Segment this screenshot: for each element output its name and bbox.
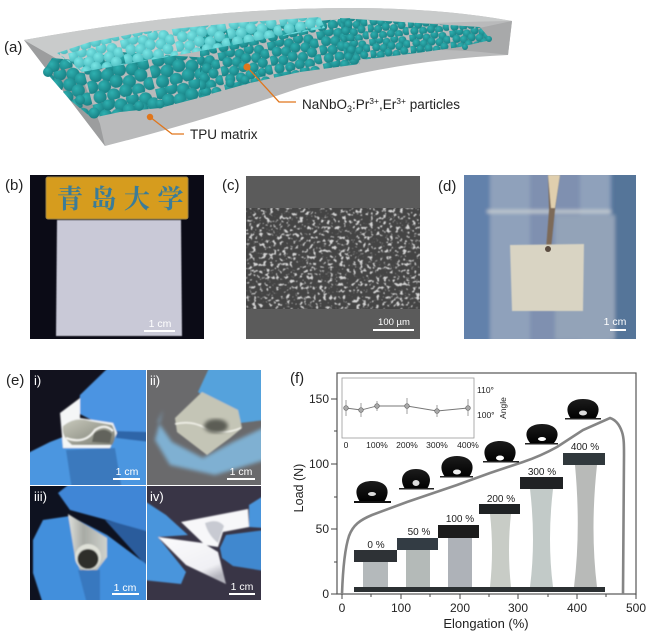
leader: particles [243, 63, 296, 102]
x tick labels: 500 [626, 601, 646, 615]
specimen strain labels: 0 % [367, 540, 385, 551]
y tick labels [309, 392, 329, 601]
label b: (b) [5, 177, 23, 194]
x tick labels [339, 601, 646, 615]
label: particles: 3+ [396, 96, 406, 106]
label c: (c) [222, 177, 240, 194]
scale bar: 1 cm [604, 316, 627, 328]
bright particles [246, 208, 420, 309]
glass beaker [464, 175, 636, 339]
label f: (f) [290, 370, 304, 387]
photo iii: 1 cm [114, 582, 137, 594]
photo iv: 1 cm [231, 581, 254, 593]
panel b: photograph of film under badge [5, 175, 204, 339]
label: matrix: TPU matrix [190, 127, 258, 142]
photo iv [143, 486, 265, 600]
dark teal particles [44, 18, 491, 118]
specimen strain labels: 200 % [487, 494, 515, 505]
SEM background [246, 176, 420, 339]
y axis title: Load (N) [292, 464, 306, 512]
scale bar: 1 cm [149, 318, 172, 330]
inset: contact angle plot: 110° [477, 385, 494, 395]
panel e: bending photographs [6, 366, 265, 604]
photo i: i) [34, 373, 41, 388]
particle band [246, 208, 420, 309]
label: particles: ,Er [379, 97, 397, 112]
scale bar [144, 318, 175, 332]
y tick labels: 50 [316, 522, 329, 536]
white film [56, 220, 182, 336]
dark background [30, 175, 204, 339]
x axis title: Elongation (%) [443, 616, 529, 631]
label: particles: particles [406, 97, 460, 112]
inset: contact angle plot: 300% [426, 440, 448, 450]
x tick labels: 0 [339, 601, 346, 615]
inset: contact angle plot: 400% [457, 440, 479, 450]
label: particles: NaNbO [302, 97, 347, 112]
label: particles: 3 [347, 104, 352, 114]
slab body [24, 8, 512, 146]
photo ii: ii) [150, 373, 160, 388]
scale bar [373, 317, 414, 331]
inset: contact angle plot: 200% [396, 440, 418, 450]
label e: (e) [6, 372, 24, 389]
film [510, 244, 584, 311]
yellow badge: 青岛大学 [57, 179, 191, 216]
specimen strain labels [367, 442, 599, 551]
specimen strain labels: 100 % [446, 514, 474, 525]
x tick labels: 300 [508, 601, 528, 615]
photo ii [147, 366, 265, 485]
inset: contact angle plot: 100% [366, 440, 388, 450]
panel a: composite slab schematic [4, 8, 512, 146]
light teal particles seen through top surface [57, 17, 325, 72]
photo iii: iii) [34, 489, 47, 504]
scattered edge particles [43, 36, 492, 118]
y tick labels: 100 [309, 457, 329, 471]
panel d: film immersed in water [438, 170, 640, 345]
inset: contact angle plot: 100° [477, 410, 495, 420]
panel c: SEM cross-section [222, 176, 420, 339]
specimen strain labels: 300 % [528, 467, 556, 478]
inset: contact angle plot: Angle [498, 397, 508, 419]
x tick labels: 400 [567, 601, 587, 615]
blue backdrop [607, 175, 614, 339]
inset: contact angle plot: 0 [344, 440, 349, 450]
scale bar: 100 µm [378, 317, 410, 328]
x tick labels: 100 [391, 601, 411, 615]
tweezers [546, 175, 560, 249]
y tick labels: 150 [309, 392, 329, 406]
load curve [342, 418, 624, 594]
water droplets [354, 399, 601, 503]
leader: matrix [147, 114, 184, 134]
inset: contact angle plot [342, 378, 508, 450]
label: particles: 3+ [369, 96, 379, 106]
y tick labels: 0 [322, 587, 329, 601]
specimen strain labels: 400 % [571, 442, 599, 453]
label d: (d) [438, 178, 456, 195]
axes frame [331, 373, 636, 599]
photo iv: iv) [150, 489, 164, 504]
photo ii: 1 cm [230, 466, 253, 478]
photo iii [30, 482, 150, 604]
tensile specimens [354, 453, 605, 592]
label: particles: :Pr [352, 97, 370, 112]
panel f: load-elongation chart [290, 370, 646, 631]
label a: (a) [4, 39, 22, 56]
photo i: 1 cm [116, 466, 139, 478]
photo i [30, 370, 146, 485]
specimen strain labels: 50 % [408, 527, 431, 538]
x tick labels: 200 [450, 601, 470, 615]
